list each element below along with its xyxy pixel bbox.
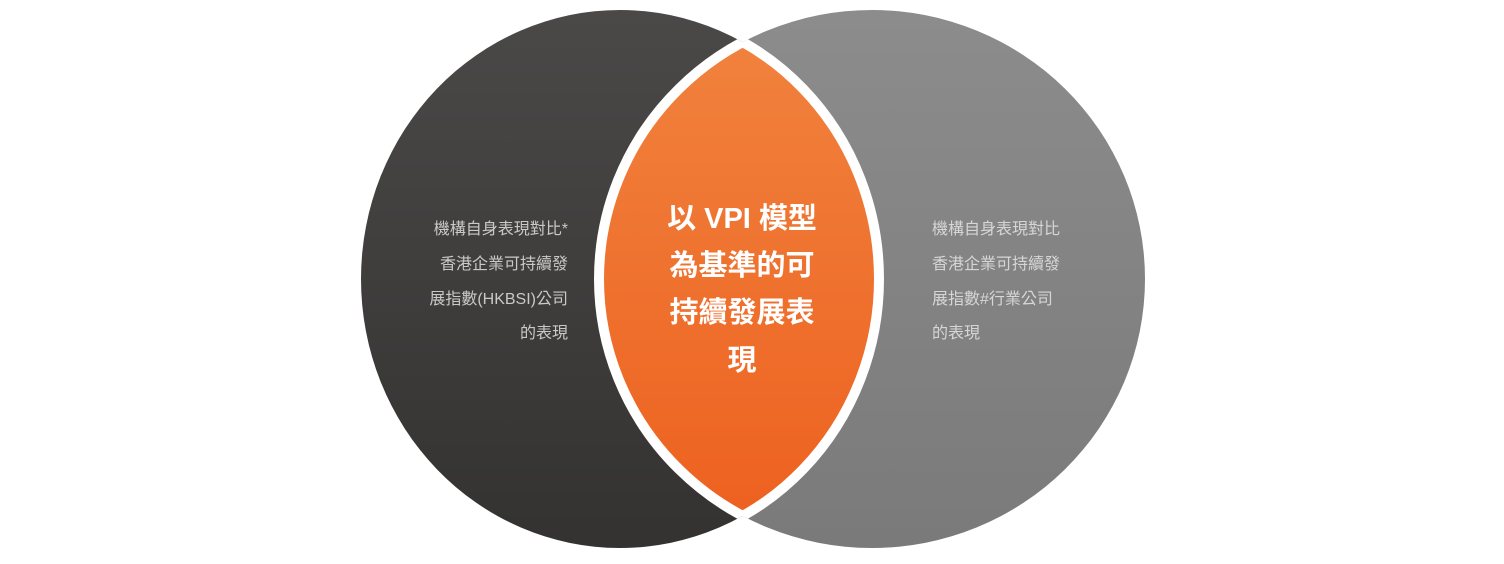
center title: 為基準的可: [669, 249, 815, 282]
right text: 香港企業可持續發: [932, 254, 1060, 273]
left text: 展指數(HKBSI)公司: [429, 290, 568, 308]
center title: [667, 202, 817, 377]
center lens: [594, 39, 884, 519]
center title: 持續發展表: [669, 296, 815, 329]
left text: 機構自身表現對比*: [434, 220, 568, 238]
right text: 機構自身表現對比: [932, 220, 1060, 238]
left text: 的表現: [520, 324, 568, 342]
venn diagram: [361, 10, 1145, 548]
right text: [932, 220, 1060, 342]
right circle: [599, 10, 1145, 548]
center title: 以 VPI 模型: [667, 202, 817, 235]
left circle: [361, 10, 879, 548]
center title: 現: [727, 345, 757, 377]
left text: [429, 220, 568, 342]
right text: 展指數#行業公司: [932, 290, 1053, 308]
left text: 香港企業可持續發: [440, 254, 568, 273]
right text: 的表現: [932, 324, 980, 342]
